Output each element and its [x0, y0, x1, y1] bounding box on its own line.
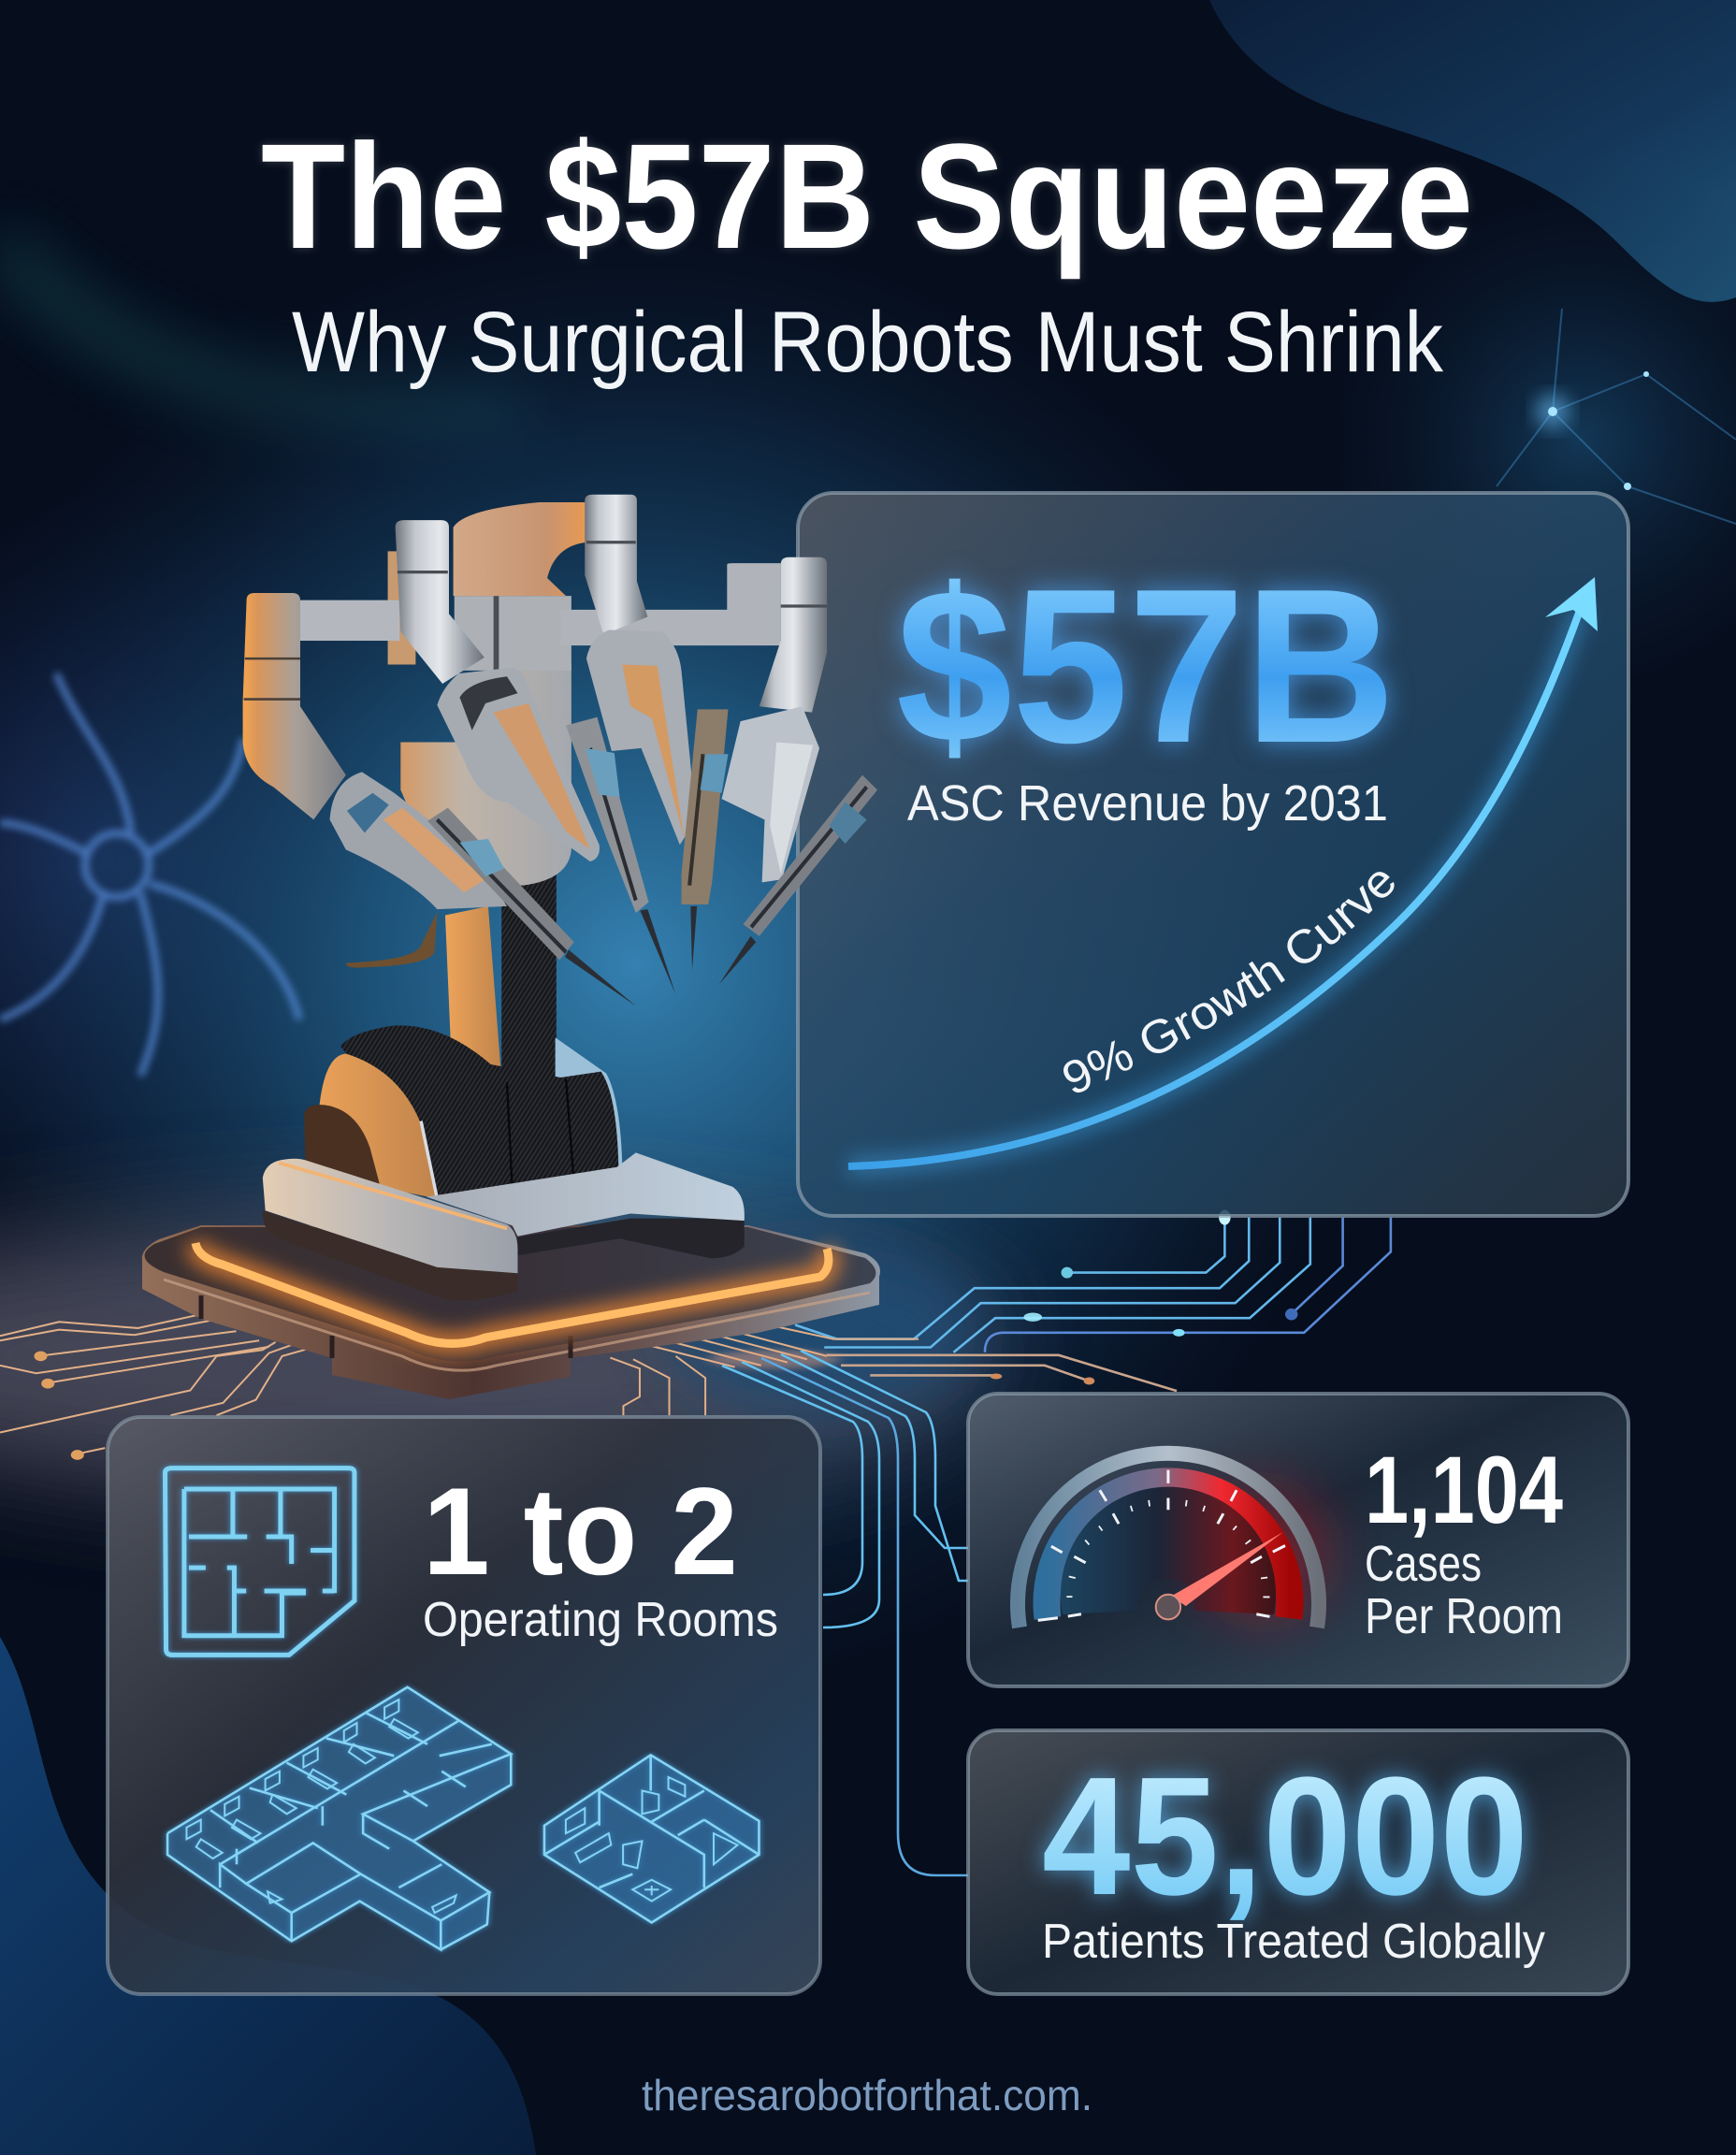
gauge [1018, 1454, 1328, 1627]
robot: arm 1 [243, 593, 636, 1005]
panel: patients treated [968, 1730, 1628, 1994]
footer url: theresarobotforthat.com. [642, 2071, 1092, 2119]
number: 1 to 2: 1 to 2 [423, 1463, 738, 1601]
platform under robot [142, 1225, 880, 1399]
robot: base foot [263, 1152, 745, 1300]
number: 45,000: 45,000 [1042, 1743, 1528, 1931]
label: cases: Cases [1365, 1536, 1482, 1592]
label: ASC revenue: ASC Revenue by 2031 [907, 775, 1388, 832]
label: patients treated: Patients Treated Globally [1042, 1915, 1545, 1969]
label: per room: Per Room [1365, 1588, 1563, 1644]
robot: arm 4 [719, 557, 877, 985]
circuit traces: blue upper connectors [795, 1210, 1391, 1391]
robot [243, 495, 877, 1300]
label: operating rooms: Operating Rooms [423, 1593, 778, 1647]
illustration: compact operating suite [544, 1755, 759, 1922]
robot: beams [300, 563, 781, 645]
robot: central column [346, 502, 587, 1079]
panel: cases per room [968, 1394, 1628, 1686]
subtitle: Why Surgical Robots Must Shrink [292, 295, 1444, 390]
panel: ASC revenue [796, 491, 1630, 1218]
growth curve arrow [848, 577, 1598, 1166]
label: growth curve: 9% Growth Curve [1063, 872, 1395, 1092]
number: 1,104: 1,104 [1365, 1437, 1563, 1543]
robot: carbon housing [304, 1025, 622, 1199]
blue connectors to the panels [722, 1351, 968, 1875]
circuit traces: lower connectors and gold fan-out [0, 1309, 919, 1460]
icon: floor plan [165, 1468, 354, 1655]
panel: operating rooms [108, 1417, 820, 1994]
big number: $57B: $57B [896, 542, 1396, 788]
title: The $57B Squeeze [261, 112, 1473, 280]
robot: arm 2 [396, 520, 675, 994]
robot: arm 3 [585, 495, 728, 970]
illustration: large hospital floor [167, 1687, 511, 1949]
